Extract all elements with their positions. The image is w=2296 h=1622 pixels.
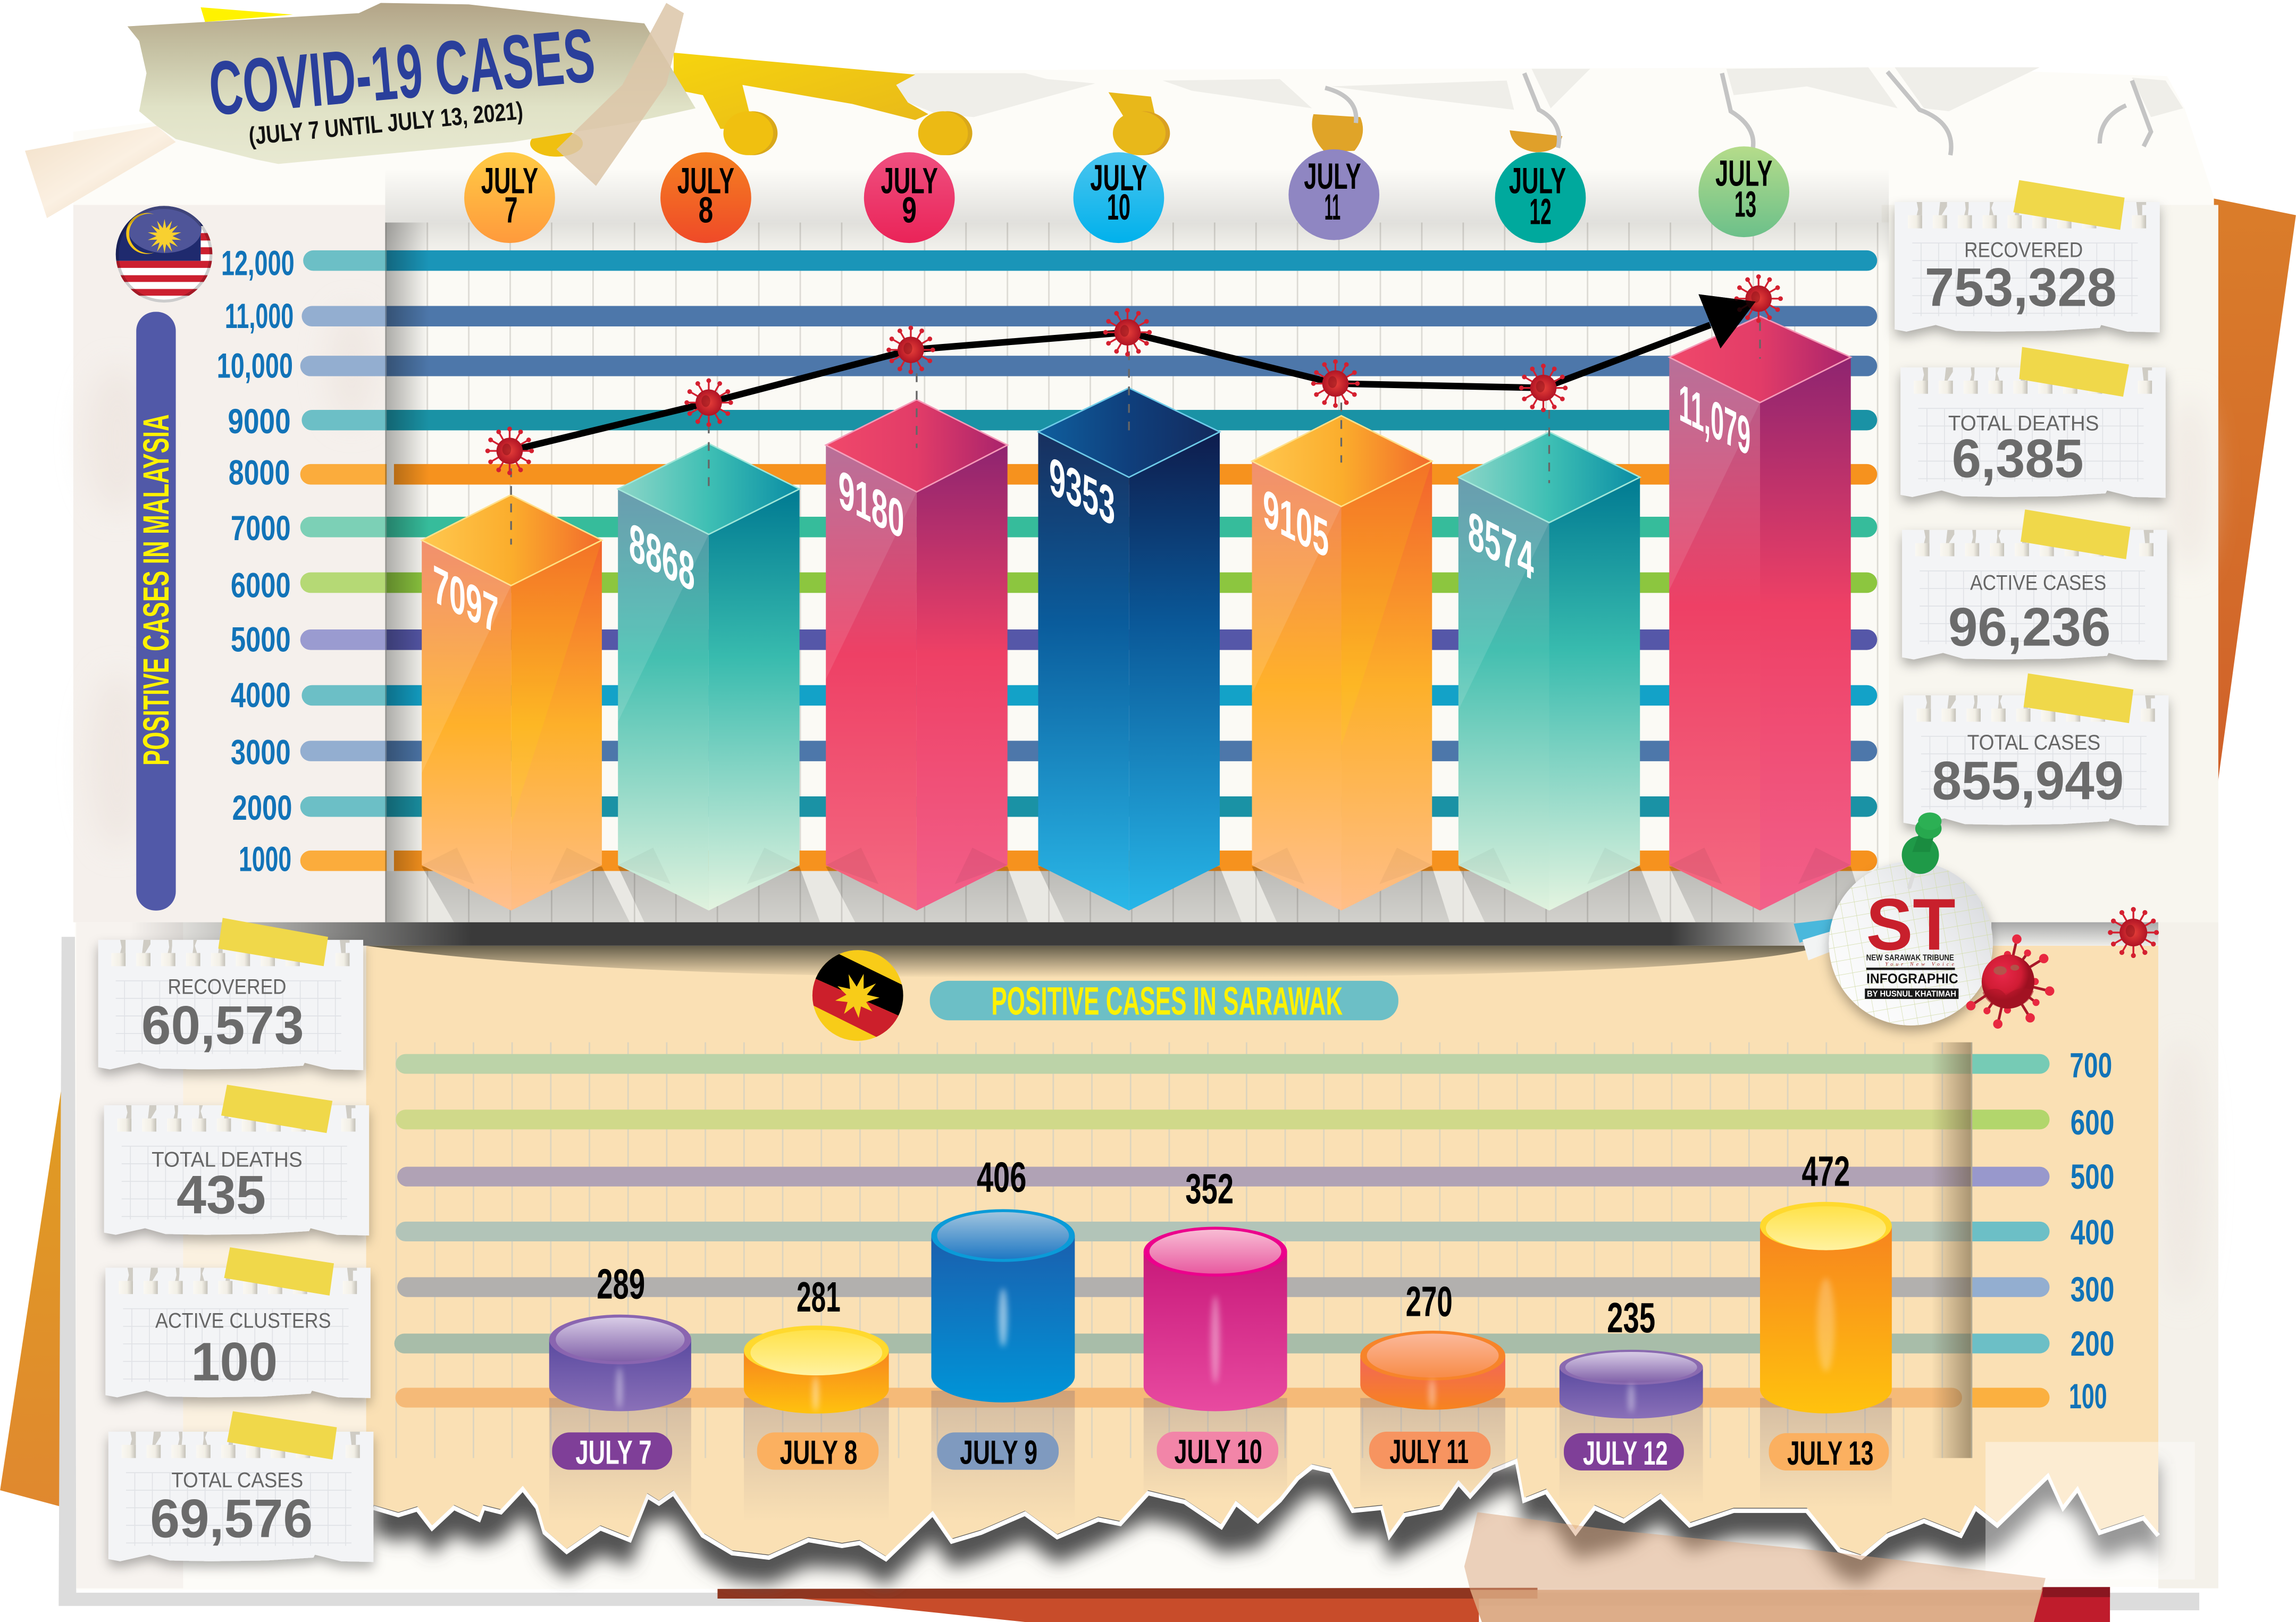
bubble July 9: 9 [902,190,917,231]
bubble July 11 [1288,149,1379,240]
card total deaths Sarawak: TOTAL DEATHS [152,1148,303,1172]
Malaysia axis labels: 6000 [231,566,291,605]
value: 289 [597,1260,645,1307]
bubble July 13: JULY [1715,153,1772,194]
bubble July 7: JULY [481,160,538,201]
value label: 9180 [839,459,904,551]
Sarawak panel left light fill [183,946,366,1519]
logo newspaper name: NEW SARAWAK TRIBUNE [1866,953,1954,962]
Malaysia axis labels: 4000 [231,676,291,715]
subtitle text: (JULY 7 UNTIL JULY 13, 2021) [247,97,524,150]
Malaysia flag icon [114,205,214,305]
pill July 12 [1564,1433,1684,1472]
bubble July 12: 12 [1529,191,1552,232]
date bubbles Malaysia [464,146,1789,243]
vertical pill text: POSITIVE CASES IN MALAYSIA [136,414,177,766]
logo badge [1829,861,1993,1026]
bubble July 13 [1698,146,1789,237]
pill July 10 [1157,1432,1278,1470]
icon green push pin [1902,812,1941,887]
card total deaths Malaysia [1900,347,2166,498]
card recovered Malaysia: RECOVERED [1964,238,2083,262]
paper blotches [85,307,2209,1303]
logo tagline: Your New Voice [1885,961,1954,967]
card recovered Sarawak: 60,573 [141,995,304,1055]
tape pieces on logo [1794,918,1863,960]
bubble July 7 [464,152,555,243]
card total deaths Malaysia: TOTAL DEATHS [1948,412,2099,435]
card total cases Sarawak [108,1411,373,1562]
card active cases Malaysia: 96,236 [1948,596,2110,657]
value: 406 [977,1153,1026,1200]
icon large virus [1966,935,2054,1029]
bar July 7 [422,495,602,911]
card total cases Sarawak: TOTAL CASES [171,1469,303,1492]
cylinder July 13 [1760,1147,1892,1414]
torn edge white lip [373,1461,2158,1559]
logo byline: BY HUSNUL KHATIMAH [1867,989,1956,998]
paper hook outlines [1325,72,2151,155]
logo infographic: INFOGRAPHIC [1866,972,1958,987]
value: 352 [1185,1165,1234,1212]
Sarawak panel background [366,946,2158,1556]
Malaysia axis labels: 1000 [239,839,291,879]
paper left margin tint [73,205,385,922]
logo ST: ST [1866,884,1956,965]
title tape right [557,3,684,186]
Malaysia axis labels: 3000 [231,733,291,772]
bar July 13 [1669,316,1851,911]
Malaysia axis labels: 2000 [232,788,292,828]
cylinder July 11 [1360,1278,1505,1410]
chart area Malaysia background [385,169,1889,922]
pill July 10: JULY 10 [1175,1433,1262,1470]
right stat cards [1895,180,2168,826]
bubble July 9: JULY [881,160,938,201]
Sarawak axis labels [2069,1046,2114,1416]
cylinder July 7 [549,1260,691,1411]
card active cases Malaysia: ACTIVE CASES [1970,572,2106,595]
bottom orange and red sheets [717,1585,2110,1622]
pill July 11 [1369,1432,1490,1470]
pill July 8: JULY 8 [780,1434,857,1472]
Malaysia axis labels: 10,000 [217,346,293,385]
Malaysia axis labels: 9000 [228,402,291,441]
value: 270 [1406,1278,1453,1325]
orange sheet right [2209,198,2296,823]
bubble July 13: 13 [1734,184,1756,225]
Malaysia axis labels: 5000 [231,620,291,659]
Malaysia axis labels: 7000 [231,509,291,548]
Sarawak axis labels: 700 [2069,1046,2112,1086]
bubble July 10: 10 [1107,187,1130,228]
virus markers [488,276,1781,473]
card total cases Malaysia [1904,674,2168,826]
card total cases Sarawak: 69,576 [150,1488,313,1549]
title tape left [25,126,176,218]
Sarawak section title pill [930,979,1398,1023]
dark band under Malaysia chart [129,922,2158,978]
trend line with arrow [509,294,1756,451]
bar July 12 [1459,432,1640,911]
Sarawak grid and bands [395,1043,2050,1458]
Sarawak axis labels: 600 [2071,1103,2114,1142]
Sarawak axis labels: 400 [2071,1213,2114,1253]
bubble July 7: 7 [505,190,518,231]
icon small virus [2110,910,2157,955]
card recovered Sarawak [98,918,363,1070]
bubble July 12: JULY [1509,160,1566,201]
card recovered Malaysia [1895,180,2160,332]
Sarawak axis labels: 100 [2069,1377,2107,1416]
bubble July 10 [1074,152,1164,243]
Malaysia axis labels: 11,000 [225,297,294,336]
card active cases Malaysia [1902,509,2167,660]
dashed connectors [511,322,1760,544]
pill July 13 [1769,1433,1889,1472]
Malaysia grid bands [300,223,1877,922]
left stat cards [98,918,373,1562]
paper right margin tint [1882,205,2218,922]
card total deaths Malaysia: 6,385 [1952,428,2084,489]
card total deaths Sarawak [104,1085,369,1236]
cylinder July 9 [931,1153,1075,1402]
value label: 8868 [629,511,695,603]
bar July 13: 11,079 [1679,373,1750,467]
bubble July 9 [864,152,955,243]
paper back shadow frame [58,937,2199,1610]
card total cases Malaysia: 855,949 [1932,750,2124,811]
vertical pill Malaysia [136,312,177,911]
orange sheet left [0,1010,76,1511]
Sarawak flag icon [812,950,903,1041]
pill July 12: JULY 12 [1583,1435,1668,1472]
card total cases Malaysia: TOTAL CASES [1967,731,2100,754]
pale overlay bottom right [1985,1442,2195,1579]
pill July 7 [552,1432,672,1472]
cylinder July 8 [744,1273,889,1414]
card active clusters Sarawak: ACTIVE CLUSTERS [155,1309,331,1333]
Sarawak axis labels: 300 [2071,1270,2114,1309]
Malaysia axis labels [217,244,295,879]
Sarawak axis labels: 200 [2071,1324,2114,1364]
bubble July 8 [660,152,751,243]
pill July 13: JULY 13 [1787,1435,1873,1472]
card total deaths Sarawak: 435 [177,1165,266,1225]
bubble July 11: 11 [1325,187,1340,228]
pill July 9: JULY 9 [960,1434,1037,1472]
card active clusters Sarawak [105,1247,371,1398]
value label: 7097 [433,554,499,646]
cylinder reflections [549,1391,1892,1523]
bar July 11 [1252,416,1432,911]
bubble July 8: 8 [699,190,713,231]
bubble July 11: JULY [1304,156,1361,197]
value: 235 [1607,1294,1655,1341]
bubble July 12 [1495,152,1586,243]
bar shadows [422,867,1868,922]
cylinder July 12 [1560,1294,1703,1418]
bar July 9 [826,400,1008,911]
card active clusters Sarawak: 100 [191,1332,278,1392]
Malaysia axis labels: 12,000 [221,244,295,283]
Malaysia axis labels: 8000 [229,453,290,492]
value: 472 [1801,1147,1850,1195]
bar July 8 [618,443,800,911]
bubble July 8: JULY [677,160,734,201]
value: 281 [797,1273,841,1321]
paper lower margin tint [2158,922,2218,1589]
bar July 10 [1038,388,1220,911]
yellow hanging tab strip [200,7,1562,157]
value label: 9105 [1263,478,1329,570]
pill July 11: JULY 11 [1389,1433,1469,1470]
bottom brown tape [1464,1512,2046,1622]
Sarawak axis labels: 500 [2071,1157,2114,1197]
date pills Sarawak [552,1432,1889,1472]
cylinder July 10 [1144,1165,1287,1411]
bubble July 10: JULY [1090,157,1147,198]
value label: 9353 [1049,446,1115,537]
title paper [128,3,695,164]
card recovered Malaysia: 753,328 [1925,257,2117,318]
paper torn flaps [896,68,2183,117]
torn edge shadow [373,1464,2158,1585]
pill July 7: JULY 7 [575,1434,652,1472]
value label: 8574 [1468,500,1534,592]
card recovered Sarawak: RECOVERED [167,976,287,999]
pill text: POSITIVE CASES IN SARAWAK [991,979,1343,1023]
